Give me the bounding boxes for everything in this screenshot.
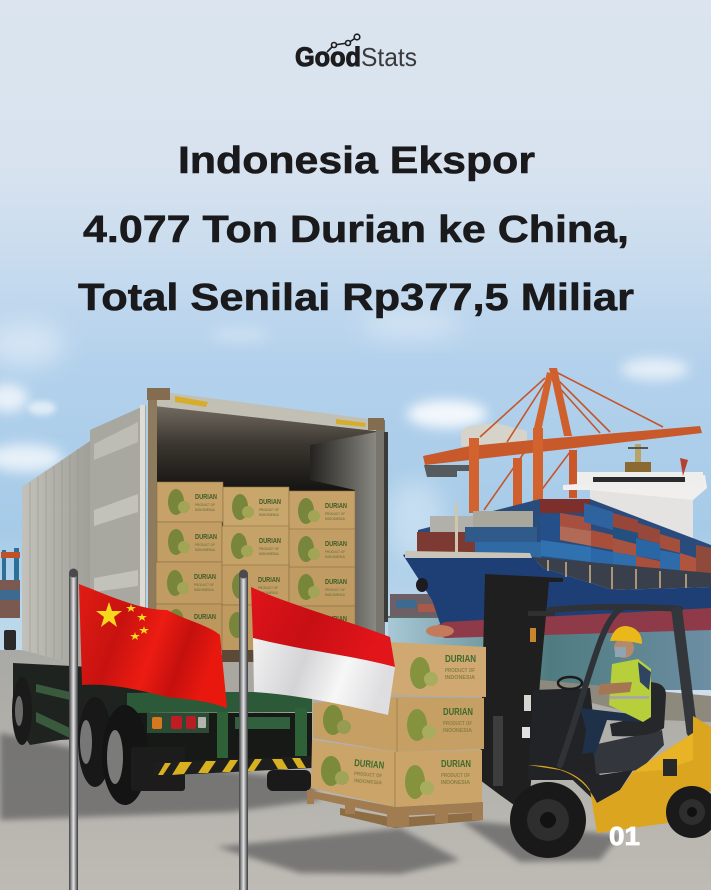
durian cartons in truck: PRODUCT OF <box>325 549 345 554</box>
distant port containers right <box>388 594 448 620</box>
durian cartons in truck: PRODUCT OF <box>195 502 215 507</box>
durian cartons in truck: PRODUCT OF <box>259 546 279 551</box>
durian cartons in truck: INDONESIA <box>259 551 279 556</box>
durian cartons on forklift <box>311 642 486 807</box>
truck chassis <box>13 663 312 763</box>
water <box>388 618 711 690</box>
truck <box>4 388 388 805</box>
durian cartons in truck: INDONESIA <box>258 590 278 595</box>
flagpole: China <box>69 568 78 890</box>
Indonesia flag <box>251 587 395 715</box>
container roof frame <box>148 390 384 432</box>
middle carton: INDONESIA <box>443 728 472 734</box>
durian cartons in truck: INDONESIA <box>259 512 279 517</box>
durian cartons in truck: INDONESIA <box>325 592 345 597</box>
operator head <box>614 638 634 658</box>
durian cartons in truck: DURIAN <box>194 614 216 621</box>
forklift mast <box>480 574 563 815</box>
middle carton: PRODUCT OF <box>443 721 472 727</box>
ground <box>0 650 711 890</box>
container side wall <box>22 441 90 668</box>
container interior <box>155 400 376 650</box>
flag stars <box>96 602 149 640</box>
truck wheels <box>12 677 311 805</box>
dock edge <box>540 680 711 722</box>
container ship <box>403 444 711 638</box>
title: 4.077 Ton Durian ke China, <box>83 209 629 251</box>
middle carton <box>313 697 484 752</box>
durian cartons in truck: PRODUCT OF <box>258 585 278 590</box>
durian cartons in truck: DURIAN <box>259 499 281 506</box>
durian cartons in truck: PRODUCT OF <box>325 511 345 516</box>
top carton <box>390 642 486 697</box>
crane trolley <box>424 465 469 477</box>
steering wheel <box>558 677 582 689</box>
sky background <box>0 0 711 660</box>
durian cartons in truck: PRODUCT OF <box>195 542 215 547</box>
shadows on ground <box>0 733 620 874</box>
bottom carton: DURIAN <box>441 759 471 770</box>
logo: GoodStats: Stats <box>361 42 417 72</box>
operator helmet <box>610 626 642 644</box>
flagpole: Indonesia <box>239 570 248 890</box>
durian cartons in truck: DURIAN <box>195 534 217 541</box>
title: Total Senilai Rp377,5 Miliar <box>78 277 634 319</box>
bottom carton: INDONESIA <box>441 780 470 786</box>
durian cartons in truck: PRODUCT OF <box>194 582 214 587</box>
forklift rear wheel <box>666 786 711 838</box>
forklift front wheel <box>510 782 586 858</box>
ship hull <box>403 552 711 638</box>
durian cartons in truck: DURIAN <box>325 616 347 623</box>
logo chart line icon <box>327 34 360 52</box>
truck side mirror <box>4 630 16 650</box>
bottom carton: PRODUCT OF <box>441 773 470 779</box>
durian cartons in truck: DURIAN <box>258 577 280 584</box>
durian cartons in truck: INDONESIA <box>195 507 215 512</box>
title: Indonesia Ekspor <box>178 140 535 182</box>
title <box>78 140 634 319</box>
durian cartons in truck: INDONESIA <box>325 516 345 521</box>
truck rear bumper <box>153 756 312 776</box>
durian cartons in truck: DURIAN <box>325 503 347 510</box>
durian cartons in truck: PRODUCT OF <box>259 507 279 512</box>
forklift seat and console <box>528 682 666 803</box>
bottom carton <box>311 740 482 807</box>
durian cartons in truck <box>156 482 355 653</box>
forklift <box>480 574 711 858</box>
durian cartons in truck: INDONESIA <box>195 547 215 552</box>
China flag <box>79 584 227 708</box>
durian cartons in truck: INDONESIA <box>325 554 345 559</box>
operator arm <box>598 682 632 695</box>
operator legs <box>580 708 640 755</box>
bottom carton: DURIAN <box>354 758 385 772</box>
truck rear sill <box>147 650 312 692</box>
forklift body <box>528 716 711 833</box>
container door panel <box>90 405 146 676</box>
logo: GoodStats <box>295 34 417 72</box>
durian cartons in truck: DURIAN <box>325 579 347 586</box>
ship cargo containers <box>417 499 711 582</box>
bottom carton: PRODUCT OF <box>354 771 382 779</box>
durian cartons in truck: DURIAN <box>195 494 217 501</box>
durian cartons in truck: INDONESIA <box>194 587 214 592</box>
machine house <box>461 423 527 447</box>
operator torso <box>609 659 651 722</box>
durian cartons in truck: DURIAN <box>259 538 281 545</box>
top carton: INDONESIA <box>445 675 475 681</box>
clouds <box>0 311 689 560</box>
logo wordmark: Good <box>295 42 361 72</box>
durian cartons in truck: DURIAN <box>325 541 347 548</box>
bottom carton: INDONESIA <box>354 778 383 786</box>
ship superstructure <box>563 444 707 556</box>
page number: 01 <box>609 821 640 851</box>
forklift operator <box>574 626 651 765</box>
cargo crane <box>423 368 702 513</box>
container door posts <box>148 390 157 675</box>
pallet <box>307 790 483 828</box>
middle carton: DURIAN <box>443 707 473 718</box>
durian cartons in truck: DURIAN <box>194 574 216 581</box>
top carton: PRODUCT OF <box>445 668 475 674</box>
top carton: DURIAN <box>445 653 476 665</box>
distant port left <box>0 548 20 618</box>
forklift roof guard <box>550 607 692 765</box>
durian cartons in truck: PRODUCT OF <box>325 587 345 592</box>
